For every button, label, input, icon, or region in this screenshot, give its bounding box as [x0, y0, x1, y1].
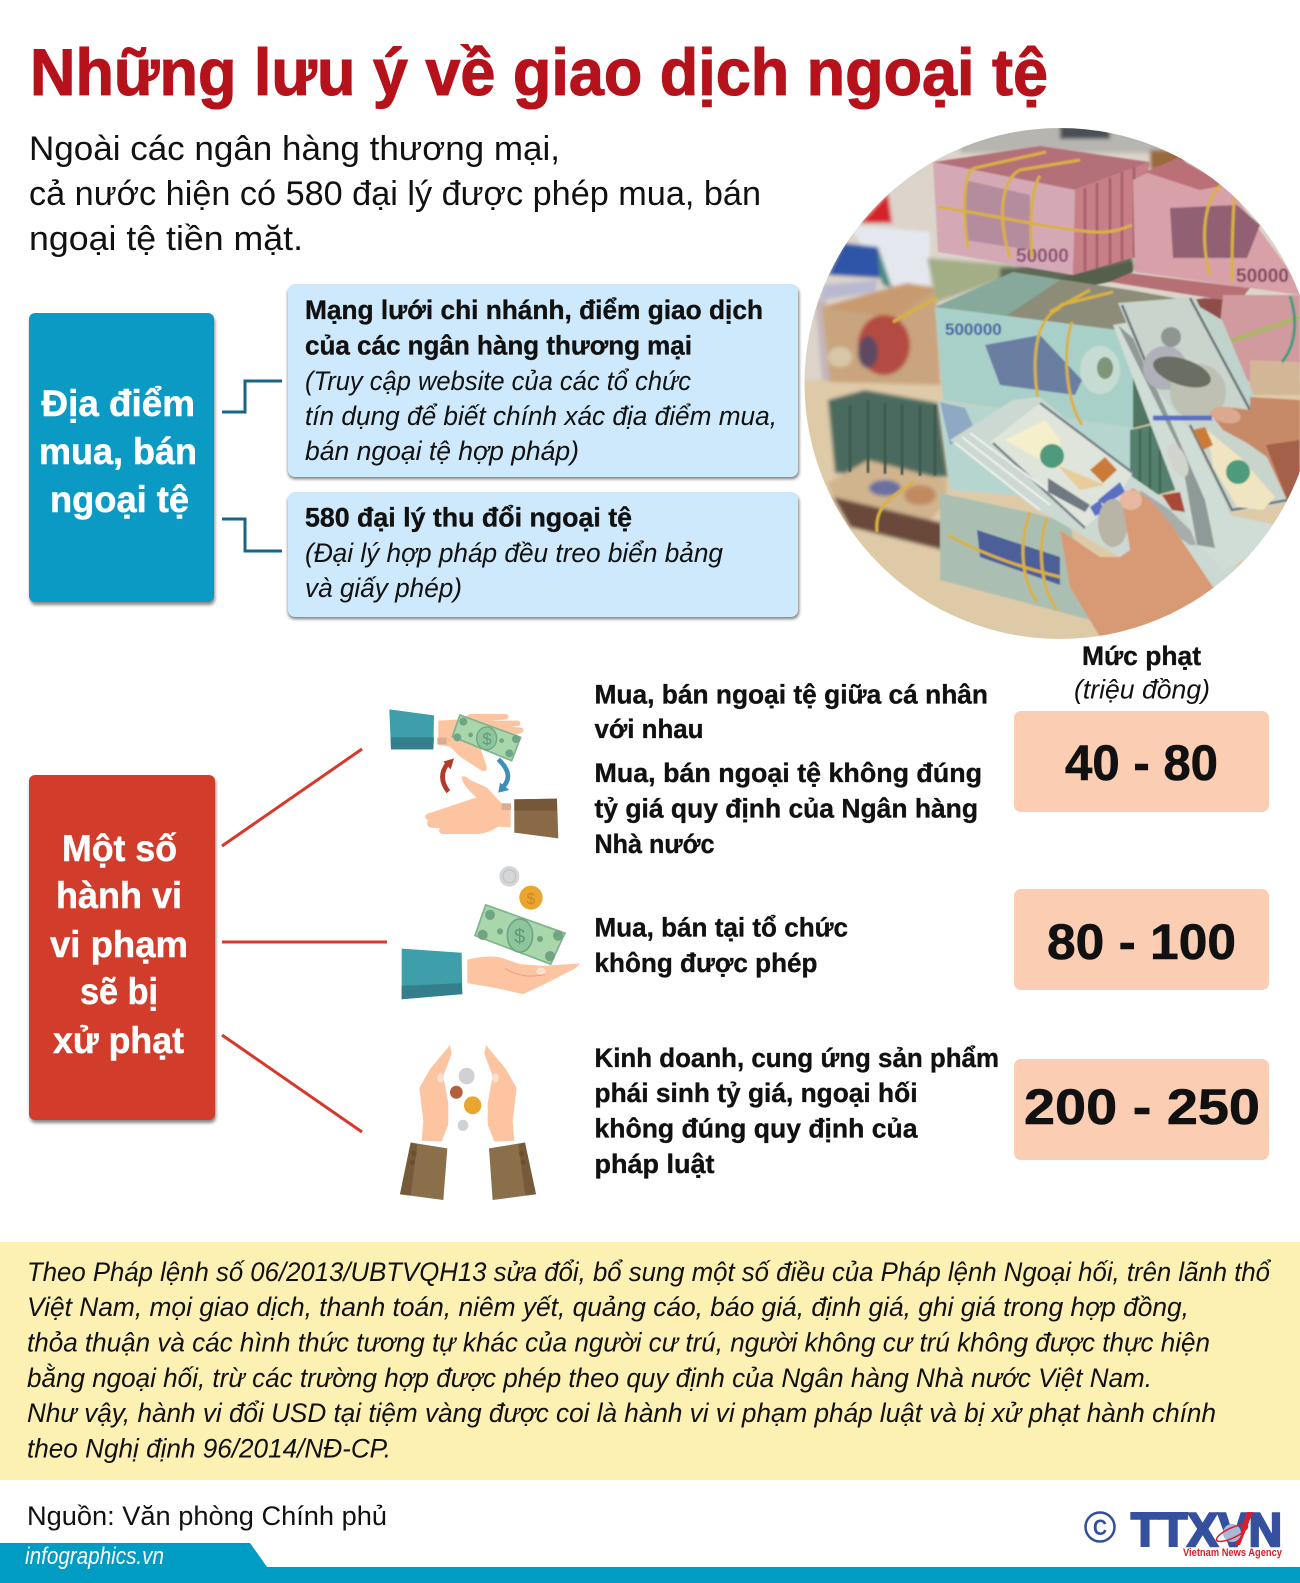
panel: bank branches: (Truy cập website của các tổ chức [305, 366, 691, 396]
violation text 2 [594, 912, 848, 978]
pink bundle 3 [1110, 272, 1250, 301]
violation text 2: không được phép [594, 948, 818, 978]
intro text [29, 130, 761, 258]
violation text 1: Nhà nước [594, 829, 714, 859]
fine column heading [1074, 641, 1210, 704]
violation text 1: tỷ giá quy định của Ngân hàng [594, 794, 978, 824]
icon: coins and banknote falling into a hand: $ [527, 891, 535, 908]
rubber bands [877, 152, 1235, 610]
panel: where to exchange, heading box: ngoại tệ [50, 479, 189, 520]
fine 80-100 [1014, 889, 1269, 990]
violation text 3: không đúng quy định của [594, 1114, 918, 1144]
logo: TTXVN: C [1093, 1515, 1107, 1540]
panel: legal note: theo Nghị định 96/2014/NĐ-CP. [27, 1434, 391, 1464]
footer bar [0, 1543, 1300, 1583]
panel: bank branches: tín dụng để biết chính xác địa điểm mua, [305, 401, 777, 431]
panel: where to exchange, heading box [29, 313, 215, 605]
panel: exchange agents: (Đại lý hợp pháp đều treo biển bảng [305, 538, 723, 568]
panel: exchange agents: và giấy phép) [305, 573, 462, 603]
intro text: ngoại tệ tiền mặt. [29, 220, 303, 258]
panel: legal note: bằng ngoại hối, trừ các trường hợp được phép theo quy định của Ngân hàng Nhà nước Việt Nam. [27, 1363, 1152, 1393]
dollars: right stack [1113, 322, 1275, 570]
fine 40-80 [1014, 711, 1269, 812]
panel: legal note: Theo Pháp lệnh số 06/2013/UBTVQH13 sửa đổi, bổ sung một số điều của Pháp lệnh Ngoại hối, trên lãnh thổ [27, 1257, 1271, 1287]
panel: bank branches: Mạng lưới chi nhánh, điểm giao dịch [305, 295, 763, 325]
violation text 1: với nhau [594, 714, 704, 744]
footer bar: infographics.vn [25, 1543, 164, 1570]
panel: legal note [0, 1242, 1300, 1480]
panel: legal note: thỏa thuận và các hình thức tương tự khác của người cư trú, người không cư trú không được thực hiện [27, 1328, 1210, 1358]
panel: exchange agents: 580 đại lý thu đổi ngoại tệ [305, 502, 632, 532]
dark vertical stripes on dark bundle [850, 400, 935, 476]
violation text 3: Kinh doanh, cung ứng sản phẩm [594, 1043, 999, 1073]
red connector lines [222, 749, 387, 1132]
violation text 3: pháp luật [594, 1149, 715, 1179]
violation text 3 [594, 1043, 999, 1179]
panel: violations heading box: Một số [62, 828, 177, 869]
pink bundle 2 [1133, 158, 1300, 295]
panel: violations heading box: sẽ bị [80, 971, 158, 1012]
panel: violations heading box [29, 775, 216, 1123]
photo: bundles of banknotes and US dollars in a circle: 50000 [1016, 246, 1069, 267]
connectors: heading box to location boxes [222, 381, 282, 551]
violation text 1: Mua, bán ngoại tệ không đúng [594, 758, 982, 788]
icon: two hands exchanging a banknote: $ [482, 730, 492, 749]
violation text 1 [594, 680, 988, 859]
panel: bank branches: của các ngân hàng thương mại [305, 330, 692, 360]
bottom blue bundle [940, 493, 1090, 620]
violation text 2: Mua, bán tại tổ chức [594, 912, 848, 942]
panel: violations heading box: vi phạm [50, 924, 188, 965]
dollars: left stack [950, 397, 1237, 590]
panel: violations heading box: xử phạt [53, 1020, 184, 1061]
panel: where to exchange, heading box: mua, bán [39, 431, 197, 472]
icon: coins and banknote falling into a hand [402, 866, 580, 999]
logo: TTXVN: TTXVN [1131, 1503, 1282, 1556]
icon: two hands cupping coins [400, 1045, 536, 1200]
intro text: Ngoài các ngân hàng thương mại, [29, 130, 560, 168]
title: Những lưu ý về giao dịch ngoại tệ [30, 35, 1048, 109]
panel: bank branches: bán ngoại tệ hợp pháp) [305, 436, 579, 466]
photo: bundles of banknotes and US dollars in a circle: 500000 [945, 320, 1002, 339]
photo: bundles of banknotes and US dollars in a circle: 50000 [1236, 266, 1289, 287]
blurred background objects [800, 120, 1300, 650]
pink bundle 1 [933, 146, 1150, 190]
lower teal block [938, 400, 1134, 496]
violation text 3: phái sinh tỷ giá, ngoại hối [594, 1078, 918, 1108]
panel: legal note: Như vậy, hành vi đổi USD tại tiệm vàng được coi là hành vi vi phạm pháp luật và bị xử phạt hành chính [27, 1398, 1216, 1428]
panel: legal note: Việt Nam, mọi giao dịch, thanh toán, niêm yết, quảng cáo, báo giá, định giá, ghi giá trong hợp đồng, [27, 1292, 1189, 1322]
panel: bank branches [288, 284, 799, 479]
intro text: cả nước hiện có 580 đại lý được phép mua, bán [29, 175, 761, 213]
fine 200-250: 200 - 250 [1024, 1079, 1260, 1135]
photo: bundles of banknotes and US dollars in a circle [800, 120, 1300, 650]
fine column heading: Mức phạt [1082, 641, 1201, 671]
violation text 1: Mua, bán ngoại tệ giữa cá nhân [594, 680, 988, 710]
green bundle edges [1059, 262, 1134, 286]
icon: coins and banknote falling into a hand: $ [514, 926, 525, 948]
icon: two hands exchanging a banknote [389, 709, 558, 838]
teal bundle [1006, 275, 1176, 330]
panel: violations heading box: hành vi [56, 875, 182, 916]
logo: TTXVN: Vietnam News Agency [1183, 1547, 1283, 1559]
fine 200-250 [1014, 1059, 1269, 1160]
panel: where to exchange, heading box: Địa điểm [42, 383, 195, 424]
fine 80-100: 80 - 100 [1047, 914, 1236, 970]
hands holding dollars [1162, 492, 1185, 512]
panel: exchange agents [288, 492, 799, 619]
fine column heading: (triệu đồng) [1074, 674, 1210, 704]
source: Nguồn: Văn phòng Chính phủ [27, 1501, 387, 1531]
fine 40-80: 40 - 80 [1065, 735, 1218, 791]
